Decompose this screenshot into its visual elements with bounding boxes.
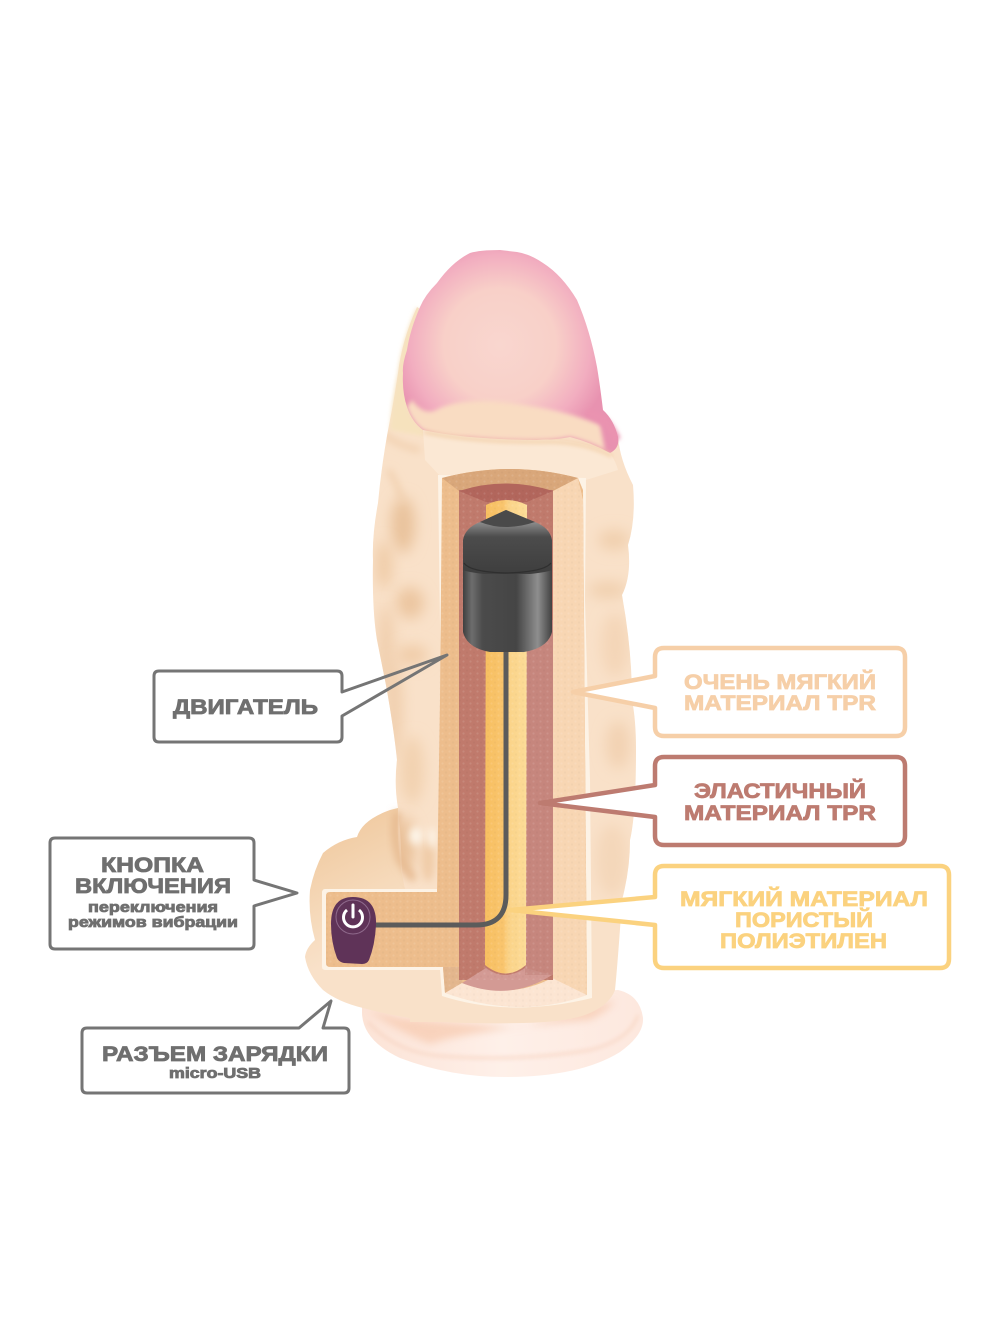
callout: very soft TPR: МАТЕРИАЛ TPR (684, 692, 876, 715)
callout: charging port (82, 1001, 349, 1093)
callout: elastic TPR: ЭЛАСТИЧНЫЙ (694, 779, 866, 803)
callout: elastic TPR: МАТЕРИАЛ TPR (684, 802, 876, 825)
callout: very soft TPR (573, 648, 905, 736)
power button (331, 897, 376, 964)
cutaway outer light edge (322, 475, 592, 1008)
callout: power button: КНОПКА (101, 854, 204, 877)
surface shading (376, 432, 630, 896)
callout: soft porous polyethylene: ПОРИСТЫЙ (735, 908, 873, 932)
callout: charging port: РАЗЪЕМ ЗАРЯДКИ (102, 1043, 328, 1066)
outer material layer (326, 469, 590, 1015)
porous polyethylene core (485, 500, 527, 974)
vibration motor (463, 510, 552, 652)
wire (372, 648, 506, 925)
callout: very soft TPR: ОЧЕНЬ МЯГКИЙ (684, 670, 876, 694)
callout: motor: ДВИГАТЕЛЬ (173, 696, 318, 719)
product cutaway illustration (305, 250, 643, 1077)
callout: charging port: micro-USB (169, 1066, 261, 1082)
callout: power button: ВКЛЮЧЕНИЯ (75, 875, 231, 898)
callout: power button (50, 838, 297, 949)
callout: power button: режимов вибрации (68, 915, 238, 931)
callout: soft porous polyethylene (510, 866, 949, 968)
elastic material layer (459, 484, 553, 991)
body silhouette (305, 307, 636, 1023)
callout: soft porous polyethylene: МЯГКИЙ МАТЕРИАЛ (680, 887, 928, 911)
callout: soft porous polyethylene: ПОЛИЭТИЛЕН (720, 930, 887, 953)
callout: power button: переключения (88, 900, 218, 916)
callout: motor (154, 655, 447, 742)
suction base (362, 990, 643, 1077)
callout: elastic TPR (540, 757, 905, 845)
tip (390, 250, 618, 480)
